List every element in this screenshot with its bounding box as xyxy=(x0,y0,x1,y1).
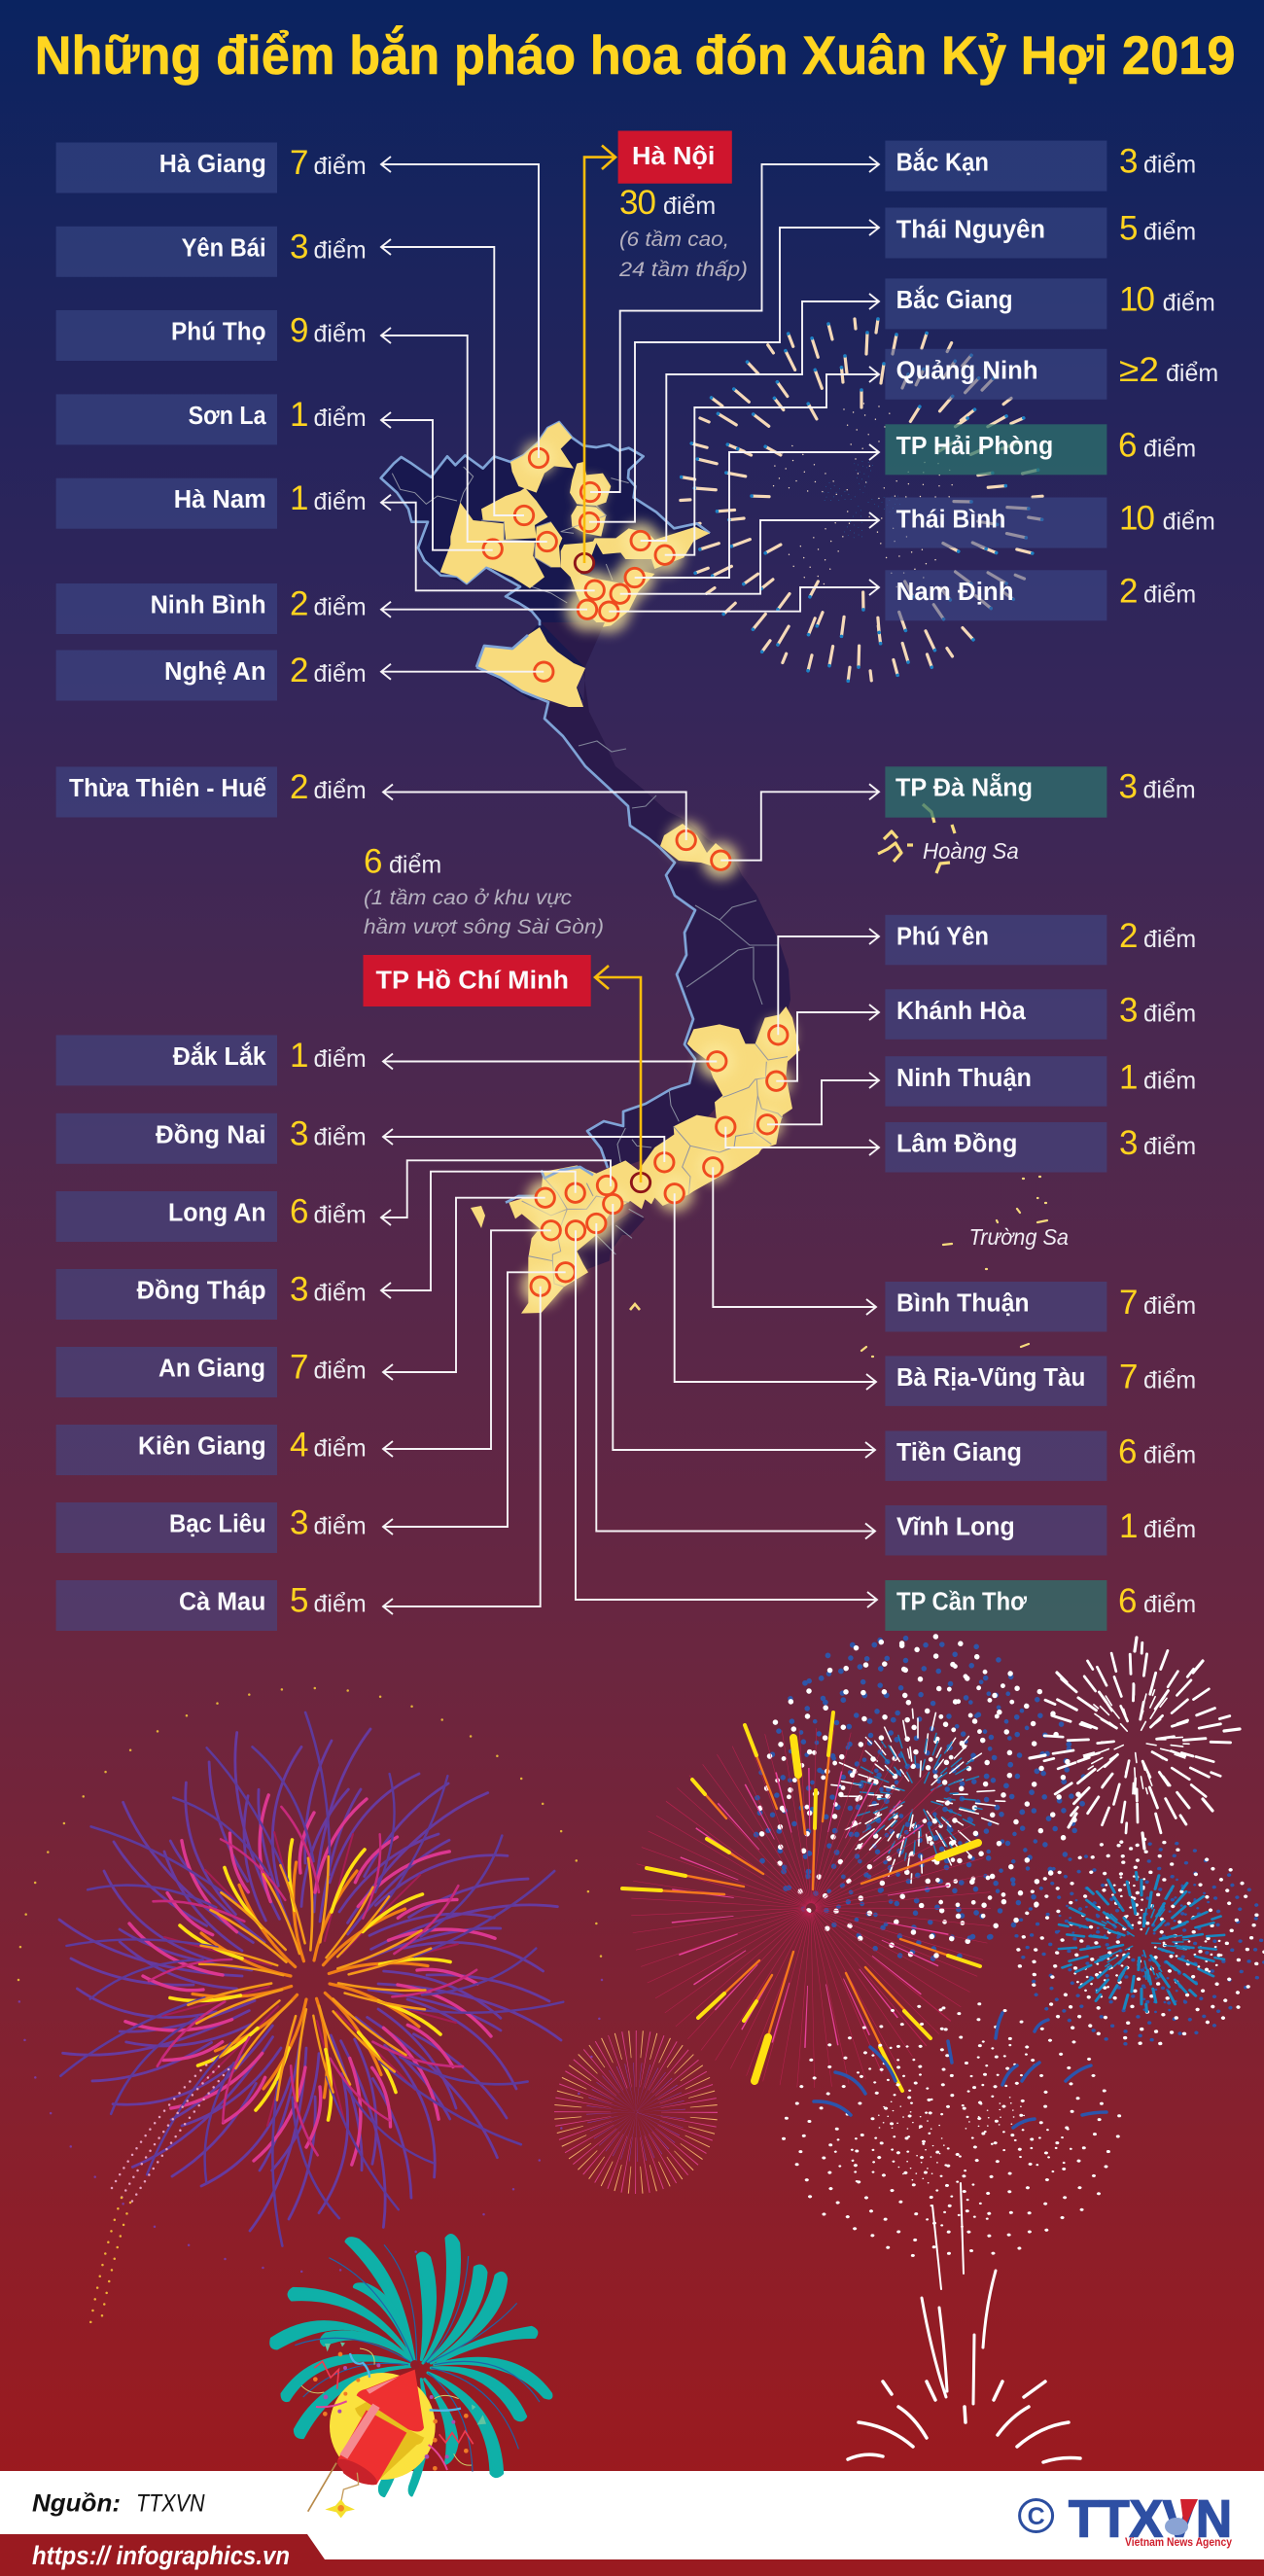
arrow: Đắk Lắk xyxy=(383,1054,717,1070)
website link: https:// infographics.vn xyxy=(32,2541,290,2570)
row: Hà Giang: điểm xyxy=(313,153,367,180)
row: Bắc Giang: điểm xyxy=(1163,290,1215,317)
arrow: Hà Nam xyxy=(381,495,595,590)
arrow: TP Hải Phòng xyxy=(635,444,879,578)
row: Ninh Thuận xyxy=(885,1056,1196,1107)
row: Bạc Liêu xyxy=(56,1502,367,1553)
row: Thái Bình: Thái Bình xyxy=(896,506,1005,533)
row: Nam Định: điểm xyxy=(1143,581,1196,608)
row: An Giang xyxy=(56,1347,367,1397)
row: Bạc Liêu: 3 xyxy=(290,1503,308,1542)
arrow: Sơn La xyxy=(381,412,493,550)
map: Phú Quốc island xyxy=(471,1206,485,1228)
row: Tiền Giang: điểm xyxy=(1143,1442,1196,1469)
row: Kiên Giang xyxy=(56,1425,367,1475)
arrow: Thừa Thiên - Huế xyxy=(383,784,686,840)
source text: TTXVN xyxy=(136,2489,205,2517)
row: Quảng Ninh: ≥2 xyxy=(1119,351,1159,389)
row: Nam Định: Nam Định xyxy=(896,579,1014,606)
callout: TP Hồ Chí Minh: TP Hồ Chí Minh xyxy=(375,967,569,994)
arrow: Khánh Hòa xyxy=(776,1005,879,1081)
row: Hà Giang: 7 xyxy=(290,144,308,182)
firework: white streak burst xyxy=(1030,1638,1240,1849)
arrow: Ninh Bình xyxy=(381,602,587,618)
row: Long An: Long An xyxy=(168,1200,266,1227)
map: central province lines xyxy=(579,741,779,1005)
row: Hà Giang xyxy=(56,142,367,193)
row: Vĩnh Long: Vĩnh Long xyxy=(896,1514,1015,1541)
row: Bình Thuận: Bình Thuận xyxy=(896,1290,1030,1318)
map: northern region xyxy=(381,422,710,700)
row: Nghệ An: điểm xyxy=(313,660,367,688)
row: Bà Rịa-Vũng Tàu: 7 xyxy=(1119,1359,1138,1396)
row: Phú Yên: Phú Yên xyxy=(896,923,989,950)
firework: white dots with blue arcs xyxy=(780,1997,1126,2263)
callout: Hà Nội: 30 xyxy=(619,184,656,222)
callout: TP Hồ Chí Minh xyxy=(364,843,604,1006)
map: western border xyxy=(476,635,695,1168)
row: Khánh Hòa xyxy=(885,989,1196,1040)
row: Phú Yên: 2 xyxy=(1119,917,1138,955)
row: Phú Thọ: 9 xyxy=(290,311,308,350)
row: Bạc Liêu: điểm xyxy=(313,1513,367,1540)
row: Thái Nguyên: Thái Nguyên xyxy=(896,216,1045,243)
row: Đồng Tháp: 3 xyxy=(290,1270,308,1309)
label: Trường Sa: Trường Sa xyxy=(969,1224,1069,1250)
arrow: Đồng Nai xyxy=(383,1129,664,1162)
row: Ninh Bình: Ninh Bình xyxy=(151,591,266,618)
row: Ninh Thuận: 1 xyxy=(1119,1058,1138,1096)
row: Kiên Giang: Kiên Giang xyxy=(138,1433,266,1461)
row: Sơn La xyxy=(56,394,367,444)
row: Ninh Bình: điểm xyxy=(313,593,367,620)
callout: TP Hồ Chí Minh: (1 tầm cao ở khu vực xyxy=(364,887,573,909)
row: Lâm Đồng: 3 xyxy=(1119,1124,1138,1162)
row: Đồng Tháp: Đồng Tháp xyxy=(137,1278,266,1305)
map: Côn Đảo island xyxy=(630,1304,640,1310)
row: Thái Bình xyxy=(885,498,1215,548)
logo: TTXVN: Vietnam News Agency xyxy=(1125,2535,1232,2549)
map of Vietnam xyxy=(381,422,1047,1357)
row: TP Cần Thơ: 6 xyxy=(1118,1582,1137,1620)
map: Hoàng Sa islets xyxy=(878,804,955,873)
row: Phú Yên xyxy=(885,915,1196,965)
location markers xyxy=(483,448,788,1295)
callout: Hà Nội: (6 tầm cao, xyxy=(619,229,729,251)
arrow: Long An xyxy=(381,1160,611,1225)
row: Bắc Giang xyxy=(885,278,1215,329)
row: Nam Định xyxy=(885,570,1196,620)
row: TP Cần Thơ: TP Cần Thơ xyxy=(896,1589,1028,1616)
row: Tiền Giang: Tiền Giang xyxy=(896,1439,1022,1466)
row: Thừa Thiên - Huế xyxy=(56,766,367,817)
arrow: Hà Nội xyxy=(584,146,615,563)
row: Tiền Giang xyxy=(885,1430,1196,1481)
row: TP Hải Phòng: TP Hải Phòng xyxy=(896,433,1053,460)
row: Thái Bình: 10 xyxy=(1119,500,1155,538)
row: Nam Định: 2 xyxy=(1119,572,1138,610)
row: Bà Rịa-Vũng Tàu: điểm xyxy=(1143,1367,1196,1394)
row: Hà Nam xyxy=(56,478,367,529)
arrow: Yên Bái xyxy=(381,239,524,515)
row: Bà Rịa-Vũng Tàu: Bà Rịa-Vũng Tàu xyxy=(896,1364,1085,1392)
arrow: Hà Giang xyxy=(381,157,539,458)
glow around firework locations xyxy=(521,441,794,1306)
map: Trường Sa islets xyxy=(861,1177,1047,1357)
row: Yên Bái: điểm xyxy=(313,236,367,264)
row: Nghệ An xyxy=(56,650,367,700)
firework: blue and white burst with teal core xyxy=(1011,1835,1264,2048)
row: Phú Thọ xyxy=(56,310,367,361)
arrow: Nghệ An xyxy=(381,664,544,680)
row: Quảng Ninh: Quảng Ninh xyxy=(896,358,1038,385)
arrow: Thái Bình xyxy=(620,512,879,594)
arrow: Quảng Ninh xyxy=(665,367,879,555)
row: Cà Mau: Cà Mau xyxy=(179,1589,265,1616)
row: Bắc Giang: 10 xyxy=(1119,280,1155,319)
row: Khánh Hòa: Khánh Hòa xyxy=(896,998,1027,1025)
row: TP Cần Thơ xyxy=(885,1580,1196,1631)
row: Hà Nam: điểm xyxy=(313,488,367,515)
row: Ninh Bình: 2 xyxy=(290,585,308,622)
row: Thừa Thiên - Huế: 2 xyxy=(290,768,308,806)
row: Lâm Đồng: điểm xyxy=(1143,1133,1196,1160)
map: Huế and Đà Nẵng xyxy=(660,824,727,868)
row: Ninh Thuận: điểm xyxy=(1143,1067,1196,1094)
row: Hà Nam: 1 xyxy=(290,479,308,517)
row: Bình Thuận: điểm xyxy=(1143,1292,1196,1320)
row: Quảng Ninh xyxy=(885,349,1218,400)
callout: Hà Nội: điểm xyxy=(663,193,716,220)
firework: bottom white fountain xyxy=(848,2183,1080,2462)
arrow: Đồng Tháp xyxy=(381,1172,576,1298)
callout: TP Hồ Chí Minh: 6 xyxy=(364,843,382,881)
row: Cà Mau: 5 xyxy=(290,1581,308,1620)
row: Phú Thọ: Phú Thọ xyxy=(171,319,266,346)
row: Đắk Lắk xyxy=(56,1035,367,1085)
row: Thừa Thiên - Huế: điểm xyxy=(313,777,367,804)
map: Nghệ An province xyxy=(476,627,585,707)
row: Bạc Liêu: Bạc Liêu xyxy=(169,1511,266,1538)
row: Thái Bình: điểm xyxy=(1163,509,1215,536)
arrow: TP Cần Thơ xyxy=(576,1230,877,1607)
row: Thái Nguyên: 5 xyxy=(1119,210,1138,248)
firework: purple pink and yellow burst xyxy=(18,1688,602,2272)
row: Hà Nam: Hà Nam xyxy=(174,486,266,513)
arrow: Bạc Liêu xyxy=(383,1272,566,1535)
row: Bình Thuận xyxy=(885,1282,1196,1332)
footer band xyxy=(0,2471,1264,2576)
row: Thừa Thiên - Huế: Thừa Thiên - Huế xyxy=(69,775,267,802)
arrow: Lâm Đồng xyxy=(725,1127,879,1155)
label: Hoàng Sa: Hoàng Sa xyxy=(923,838,1019,864)
row: Long An xyxy=(56,1191,367,1242)
source text xyxy=(32,2489,205,2517)
row: Đắk Lắk: Đắk Lắk xyxy=(173,1041,266,1071)
row: Bình Thuận: 7 xyxy=(1119,1284,1138,1322)
row: Đắk Lắk: 1 xyxy=(290,1037,308,1075)
row: Đồng Nai: Đồng Nai xyxy=(156,1121,266,1148)
row: Bà Rịa-Vũng Tàu xyxy=(885,1356,1196,1406)
row: An Giang: điểm xyxy=(313,1358,367,1385)
row: TP Hải Phòng xyxy=(885,424,1196,475)
row: Khánh Hòa: điểm xyxy=(1143,1000,1196,1027)
row: Sơn La: Sơn La xyxy=(189,403,266,430)
map: southern region xyxy=(506,1006,800,1314)
callout: Hà Nội: 24 tầm thấp) xyxy=(618,259,748,281)
row: Hà Giang: Hà Giang xyxy=(159,151,266,178)
row: Quảng Ninh: điểm xyxy=(1166,360,1218,387)
arrow: Phú Thọ xyxy=(381,328,547,542)
row: TP Hải Phòng: điểm xyxy=(1143,435,1196,462)
row: Đắk Lắk: điểm xyxy=(313,1045,367,1073)
row: TP Đà Nẵng: điểm xyxy=(1143,777,1196,804)
firework: red pink radial burst with yellow streaks xyxy=(622,1712,980,2091)
arrow: Bình Thuận xyxy=(713,1167,876,1315)
row: An Giang: 7 xyxy=(290,1348,308,1387)
row: Thái Nguyên: điểm xyxy=(1143,219,1196,246)
icon: rocket with teal fan xyxy=(271,2235,551,2518)
row: Thái Nguyên xyxy=(885,208,1196,259)
firework: peach burst behind the north-east labels xyxy=(680,319,1043,682)
callout: TP Hồ Chí Minh: điểm xyxy=(389,852,441,879)
row: Kiên Giang: điểm xyxy=(313,1435,367,1463)
arrow: An Giang xyxy=(383,1198,545,1380)
row: Phú Thọ: điểm xyxy=(313,321,367,348)
row: TP Đà Nẵng: 3 xyxy=(1118,768,1138,806)
row: TP Hải Phòng: 6 xyxy=(1118,426,1137,464)
row: Khánh Hòa: 3 xyxy=(1119,992,1138,1029)
arrow: TP Đà Nẵng xyxy=(720,784,879,861)
row: Nghệ An: Nghệ An xyxy=(164,658,266,686)
row: Ninh Bình xyxy=(56,583,367,634)
firework: blue and white dotted burst xyxy=(744,1629,1090,1968)
arrow: Phú Yên xyxy=(778,929,879,1035)
row: Long An: 6 xyxy=(290,1192,308,1231)
row: Bắc Giang: Bắc Giang xyxy=(896,285,1013,314)
row: TP Đà Nẵng xyxy=(885,766,1196,818)
row: Long An: điểm xyxy=(313,1202,367,1229)
arrow: Bà Rịa-Vũng Tàu xyxy=(675,1193,876,1390)
row: Cà Mau xyxy=(56,1580,367,1631)
row: Yên Bái xyxy=(56,227,367,277)
row: TP Đà Nẵng: TP Đà Nẵng xyxy=(895,773,1033,802)
row: Phú Yên: điểm xyxy=(1143,926,1196,953)
map: central region xyxy=(541,622,790,1168)
row: An Giang: An Giang xyxy=(158,1356,265,1383)
arrow: Thái Nguyên xyxy=(589,220,879,522)
row: Vĩnh Long xyxy=(885,1505,1196,1556)
row: Sơn La: 1 xyxy=(290,396,308,434)
arrow: Nam Định xyxy=(609,580,879,612)
arrow: Cà Mau xyxy=(383,1287,541,1614)
row: Cà Mau: điểm xyxy=(313,1591,367,1618)
row: Sơn La: điểm xyxy=(313,405,367,432)
firework: rising sparks trail xyxy=(89,2060,228,2329)
row: Đồng Nai: điểm xyxy=(313,1123,367,1150)
arrow: Ninh Thuận xyxy=(767,1073,879,1124)
firework: small pink and orange burst xyxy=(568,2044,704,2180)
row: Đồng Tháp: điểm xyxy=(313,1280,367,1307)
row: Kiên Giang: 4 xyxy=(290,1426,308,1464)
row: Tiền Giang: 6 xyxy=(1118,1433,1137,1471)
row: Lâm Đồng: Lâm Đồng xyxy=(896,1131,1017,1158)
row: Vĩnh Long: điểm xyxy=(1143,1516,1196,1543)
row: Bắc Kạn xyxy=(885,141,1196,192)
row: TP Cần Thơ: điểm xyxy=(1143,1591,1196,1618)
row: Yên Bái: 3 xyxy=(290,228,308,265)
row: Yên Bái: Yên Bái xyxy=(182,234,266,262)
row: Vĩnh Long: 1 xyxy=(1119,1507,1138,1545)
row: Bắc Kạn: Bắc Kạn xyxy=(896,147,989,176)
callout: TP Hồ Chí Minh: hầm vượt sông Sài Gòn) xyxy=(364,916,604,938)
arrow: Bắc Kạn xyxy=(590,157,879,492)
callout: Hà Nội xyxy=(618,130,748,281)
logo: TTXVN: C xyxy=(1028,2503,1045,2530)
source text: Nguồn: xyxy=(32,2489,121,2517)
row: Bắc Kạn: điểm xyxy=(1143,152,1196,179)
logo: TTXVN: TTXVN xyxy=(1069,2490,1232,2549)
row: Đồng Tháp xyxy=(56,1269,367,1320)
row: Đồng Nai: 3 xyxy=(290,1114,308,1152)
arrow: Vĩnh Long xyxy=(596,1223,875,1538)
arrow: Kiên Giang xyxy=(383,1230,551,1457)
row: Nghệ An: 2 xyxy=(290,652,308,689)
callout: Hà Nội: Hà Nội xyxy=(632,143,715,170)
row: Ninh Thuận: Ninh Thuận xyxy=(896,1065,1032,1092)
arrow: TP Hồ Chí Minh xyxy=(595,966,641,1182)
row: Lâm Đồng xyxy=(885,1122,1196,1173)
row: Bắc Kạn: 3 xyxy=(1119,143,1138,181)
row: Đồng Nai xyxy=(56,1113,367,1164)
arrow: Tiền Giang xyxy=(613,1204,875,1458)
arrow: Bắc Giang xyxy=(641,294,879,541)
